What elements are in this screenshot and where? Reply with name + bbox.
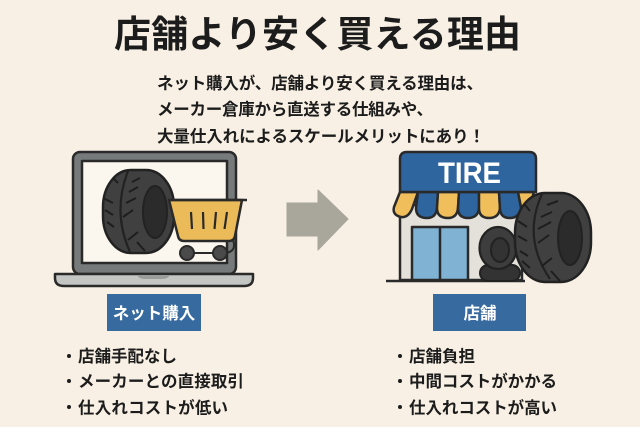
intro text block: ネット購入が、店舗より安く買える理由は、 [157,73,483,93]
intro text block: 大量仕入れによるスケールメリットにあり！ [157,127,485,146]
list: net purchase points [67,346,244,418]
label: net purchase: ネット購入 [113,304,196,323]
tire [103,170,174,253]
list: net purchase points: 仕入れコストが低い [78,398,228,418]
title: 店舗より安く買える理由 [114,14,521,55]
arrow [287,190,348,250]
list: net purchase points: メーカーとの直接取引 [78,372,244,391]
label: store [433,294,526,331]
laptop body [73,152,236,274]
list: store points: 仕入れコストが高い [409,398,557,418]
sign text: TIRE [438,157,501,190]
laptop notch [137,275,170,279]
list: store points: 中間コストがかかる [409,371,557,391]
label: store: 店舗 [464,303,496,323]
awning sign [400,152,536,192]
icon: tire store [386,152,591,282]
shopping cart [168,200,247,260]
icon: laptop with tire and shopping cart [55,152,253,286]
list: store points [398,346,557,418]
intro text block [157,73,485,146]
small stacked tires [480,227,520,281]
awning scallops [394,192,534,218]
laptop base [55,274,253,286]
intro text block: メーカー倉庫から直送する仕組みや、 [157,99,433,119]
ground line [386,280,525,282]
list: store points: 店舗負担 [409,346,475,366]
laptop screen [82,161,227,263]
label: net purchase [107,294,201,331]
store door [412,227,468,280]
list: net purchase points: 店舗手配なし [78,346,177,366]
large tire [515,193,591,282]
store wall [400,205,522,280]
